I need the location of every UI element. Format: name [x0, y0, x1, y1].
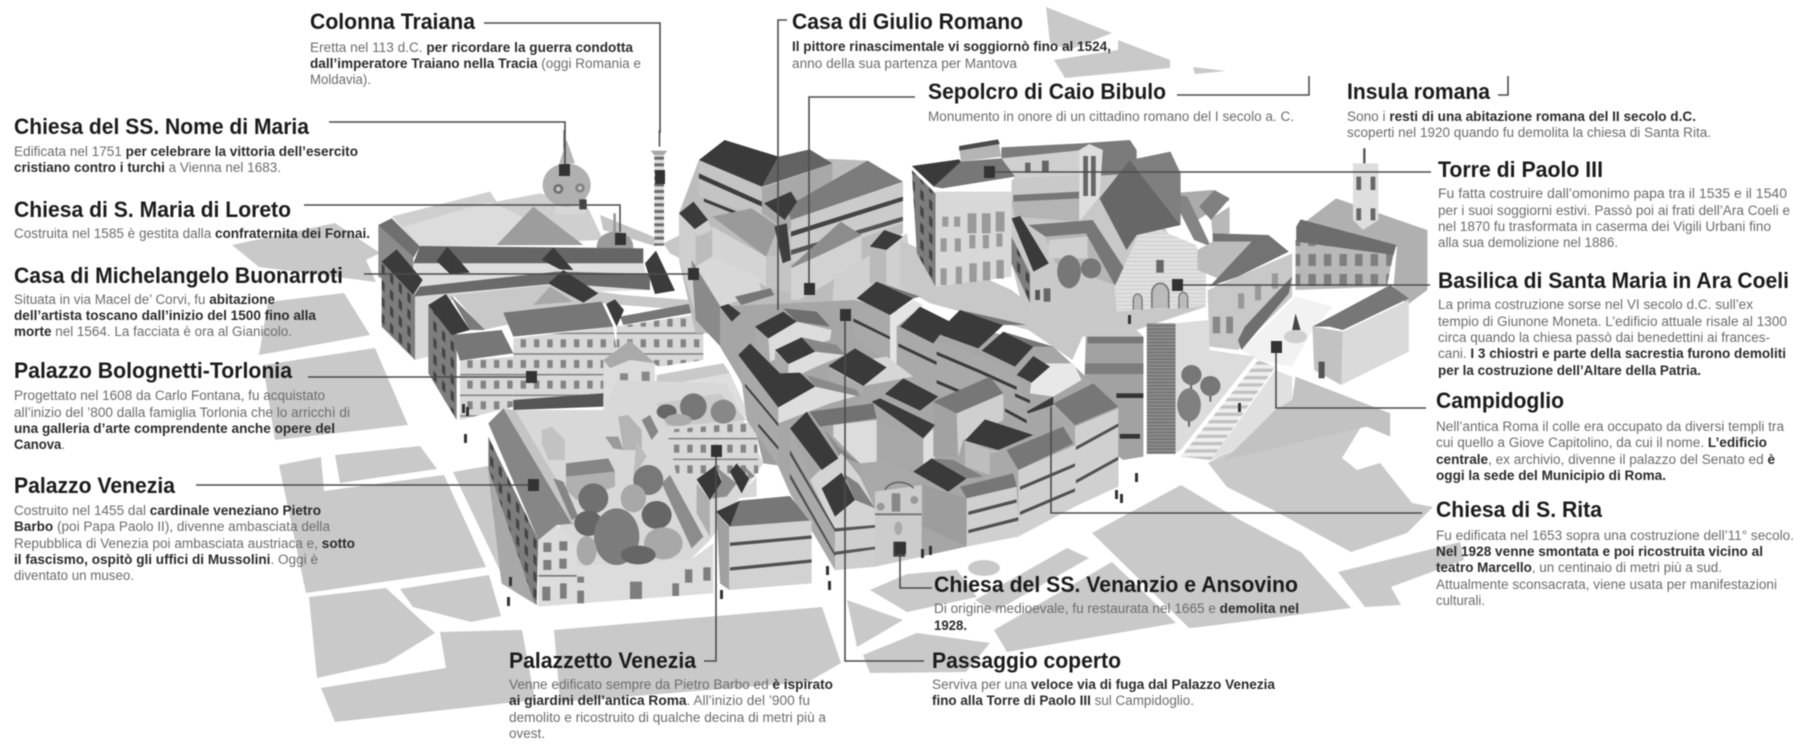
- label: Palazzetto Venezia: ovest.: [509, 726, 545, 741]
- Palazzo Nuovo side building: [1198, 233, 1292, 350]
- label: Palazzo Venezia: Costruito nel 1455 dal cardinale veneziano Pietro: [14, 503, 321, 518]
- Palazzo Venezia courtyard: [488, 380, 787, 607]
- map illustration: [232, 7, 1464, 722]
- Palazzo dei Conservatori: [1312, 285, 1409, 385]
- label: Chiesa del SS. Nome di Maria: Chiesa del SS. Nome di Maria: [14, 114, 309, 139]
- label: Basilica di Santa Maria in Ara Coeli: circa quando la chiesa passò dai benedettini ai frances-: [1438, 330, 1770, 345]
- label: Casa di Michelangelo Buonarroti: Situata in via Macel de’ Corvi, fu abitazione: [14, 292, 275, 307]
- label: Passaggio coperto: [932, 648, 1275, 708]
- Piazza del Campidoglio: [1241, 297, 1333, 367]
- label: Palazzetto Venezia: Venne edificato sempre da Pietro Barbo ed è ispirato: [509, 677, 833, 692]
- label: Campidoglio: Nell’antica Roma il colle era occupato da diversi templi tra: [1436, 419, 1784, 434]
- base of central block: [720, 300, 1118, 570]
- label: Passaggio coperto: fino alla Torre di Paolo III sul Campidoglio.: [932, 693, 1194, 708]
- label: Casa di Giulio Romano: [792, 9, 1111, 71]
- label: Chiesa di S. Rita: teatro Marcello, un centinaio di metri più a sud.: [1436, 560, 1722, 575]
- label: Basilica di Santa Maria in Ara Coeli: [1438, 268, 1789, 378]
- label: Insula romana: Sono i resti di una abitazione romana del II secolo d.C.: [1347, 109, 1696, 124]
- label: Chiesa di S. Maria di Loreto: Chiesa di S. Maria di Loreto: [14, 197, 291, 222]
- label: Casa di Giulio Romano: Casa di Giulio Romano: [792, 9, 1023, 34]
- label: Torre di Paolo III: nel 1870 fu trasformata in caserma dei Vigili Urbani fino: [1438, 219, 1771, 234]
- leader: Basilica di Santa Maria in Ara Coeli: [1172, 279, 1430, 291]
- Capitoline buildings, Ara Coeli and stairs: [900, 139, 1427, 460]
- Basilica roof: [1099, 152, 1230, 250]
- label: Palazzo Venezia: Barbo (poi Papa Paolo II), divenne ambasciata della: [14, 519, 330, 534]
- leader: Passaggio coperto: [840, 309, 924, 661]
- leader: Insula romana: [1498, 76, 1508, 95]
- left palazzo complex with domes and column: [378, 130, 750, 420]
- church of SS. Venanzio e Ansovino: [860, 460, 923, 567]
- label: Palazzo Venezia: diventato un museo.: [14, 568, 134, 583]
- label: Campidoglio: Campidoglio: [1436, 388, 1564, 413]
- label: Basilica di Santa Maria in Ara Coeli: La prima costruzione sorse nel VI secolo d.C. sull’ex: [1438, 297, 1753, 312]
- label: Palazzo Bolognetti-Torlonia: Progettato nel 1608 da Carlo Fontana, fu acquistato: [14, 388, 325, 403]
- leader: Chiesa del SS. Nome di Maria: [329, 122, 570, 176]
- leader: S. Maria di Loreto: [304, 205, 626, 245]
- label: Palazzetto Venezia: [509, 648, 833, 741]
- mid houses: [738, 308, 1007, 477]
- label: Colonna Traiana: Colonna Traiana: [310, 9, 475, 34]
- label: Colonna Traiana: dall’imperatore Traiano nella Tracia (oggi Romania e: [310, 56, 641, 71]
- leader: Palazzetto Venezia: [704, 445, 722, 661]
- leader: Colonna Traiana: [484, 23, 665, 184]
- label: Torre di Paolo III: [1438, 157, 1790, 250]
- label: Chiesa del SS. Venanzio e Ansovino: Di origine medioevale, fu restaurata nel 1665 e demolita nel: [934, 601, 1299, 616]
- leader: Sepolcro to Insula: [1177, 76, 1309, 95]
- Senatorio with tower: [1296, 148, 1427, 305]
- label: Palazzo Venezia: Repubblica di Venezia poi ambasciata austriaca e, sotto: [14, 536, 355, 551]
- label: Passaggio coperto: Passaggio coperto: [932, 648, 1121, 673]
- label: Chiesa di S. Rita: Attualmente sconsacrata, viene usata per manifestazioni: [1436, 577, 1777, 592]
- Cloister: [1012, 216, 1127, 313]
- leader: Campidoglio: [1271, 341, 1426, 408]
- label: Chiesa di S. Rita: Fu edificata nel 1653 sopra una costruzione dell’11° secolo.: [1436, 528, 1794, 543]
- label: Chiesa di S. Rita: culturali.: [1436, 593, 1485, 608]
- label: Casa di Michelangelo Buonarroti: [14, 263, 343, 339]
- label: Sepolcro di Caio Bibulo: Sepolcro di Caio Bibulo: [928, 79, 1166, 104]
- dark roofs row: [857, 282, 1050, 383]
- ground: city blocks: [232, 7, 1464, 722]
- Basilica façade: [1115, 230, 1206, 312]
- label: Chiesa del SS. Nome di Maria: cristiano contro i turchi a Vienna nel 1683.: [14, 160, 281, 175]
- label: Casa di Michelangelo Buonarroti: Casa di Michelangelo Buonarroti: [14, 263, 343, 288]
- label: Torre di Paolo III: Torre di Paolo III: [1438, 157, 1603, 182]
- label: Chiesa del SS. Venanzio e Ansovino: 1928.: [934, 618, 967, 633]
- dense central houses: [720, 282, 1118, 570]
- label: Colonna Traiana: [310, 9, 641, 87]
- long row of houses behind: [853, 300, 1082, 423]
- label: Chiesa di S. Rita: Nel 1928 venne smontata e poi ricostruita vicino al: [1436, 544, 1763, 559]
- label: Palazzo Bolognetti-Torlonia: all’inizio del ’800 dalla famiglia Torlonia che lo arricchì di: [14, 405, 350, 420]
- label: Insula romana: Insula romana: [1347, 79, 1490, 104]
- label: Basilica di Santa Maria in Ara Coeli: tempio di Giunone Moneta. L’edificio attuale risale al 1300: [1438, 314, 1787, 329]
- trees in the garden: [574, 465, 683, 565]
- leader: Torre di Paolo III: [984, 166, 1431, 178]
- label: Passaggio coperto: Serviva per una veloce via di fuga dal Palazzo Venezia: [932, 677, 1275, 692]
- label: Casa di Michelangelo Buonarroti: dell’artista toscano dall’inizio del 1500 fino alla: [14, 308, 316, 323]
- label: Chiesa del SS. Venanzio e Ansovino: [934, 572, 1299, 633]
- label: Palazzo Bolognetti-Torlonia: [14, 358, 350, 452]
- front right row: [913, 383, 1118, 547]
- label: Campidoglio: cui quello a Giove Capitolino, da cui il nome. L’edificio: [1436, 435, 1767, 450]
- label: Chiesa di S. Maria di Loreto: [14, 197, 370, 241]
- lower left column of houses: [790, 412, 875, 570]
- label: Chiesa del SS. Nome di Maria: [14, 114, 358, 175]
- icon: Trajan column: [651, 130, 667, 246]
- leader: Palazzo Bolognetti-Torlonia: [308, 371, 537, 383]
- label: Insula romana: scoperti nel 1920 quando fu demolita la chiesa di Santa Rita.: [1347, 125, 1711, 140]
- label: Torre di Paolo III: per i suoi soggiorni estivi. Passò poi ai frati dell’Ara Coeli e: [1438, 203, 1790, 218]
- label: Palazzo Bolognetti-Torlonia: Canova.: [14, 437, 65, 452]
- central upper cluster of houses: [679, 140, 915, 347]
- leader: Casa di Michelangelo: [364, 268, 699, 280]
- leader: Casa di Giulio Romano: [778, 20, 787, 310]
- Palazzo with Torre di Paolo III: [912, 139, 1137, 287]
- label: Palazzetto Venezia: ai giardini dell’antica Roma. All’inizio del ’900 fu: [509, 693, 810, 708]
- label: Campidoglio: [1436, 388, 1784, 483]
- label: Casa di Giulio Romano: Il pittore rinascimentale vi soggiornò fino al 1524,: [792, 39, 1111, 54]
- label: Colonna Traiana: Moldavia).: [310, 72, 371, 87]
- label: Palazzetto Venezia: Palazzetto Venezia: [509, 648, 696, 673]
- label: Palazzo Venezia: il fascismo, ospitò gli uffici di Mussolini. Oggi è: [14, 552, 318, 567]
- label: Palazzetto Venezia: demolito e ricostruito di qualche decina di metri più a: [509, 710, 826, 725]
- label: Palazzo Venezia: Palazzo Venezia: [14, 473, 175, 498]
- label: Sepolcro di Caio Bibulo: Monumento in onore di un cittadino romano del I secolo a. C.: [928, 109, 1294, 124]
- label: Casa di Michelangelo Buonarroti: morte nel 1564. La facciata è ora al Gianicolo.: [14, 324, 292, 339]
- leader: Palazzo Venezia: [196, 479, 539, 491]
- label: Basilica di Santa Maria in Ara Coeli: cani. I 3 chiostri e parte della sacrestia furono demoliti: [1438, 346, 1786, 361]
- Aracoeli stairs and buildings beside: [1083, 320, 1390, 460]
- label: Basilica di Santa Maria in Ara Coeli: per la costruzione dell’Altare della Patria.: [1438, 363, 1701, 378]
- label: Torre di Paolo III: Fu fatta costruire dall’omonimo papa tra il 1535 e il 1540: [1438, 186, 1787, 201]
- label: Insula romana: [1347, 79, 1711, 140]
- label: Sepolcro di Caio Bibulo: [928, 79, 1294, 124]
- Palazzetto façade: [657, 393, 758, 475]
- pedestrians: [462, 315, 1241, 606]
- icon: dome of SS. Nome di Maria: [543, 130, 591, 214]
- label: Torre di Paolo III: alla sua demolizione nel 1886.: [1438, 235, 1618, 250]
- building front of Palazzo Venezia: [716, 496, 812, 590]
- label: Campidoglio: oggi la sede del Municipio di Roma.: [1436, 468, 1666, 483]
- leader: SS. Venanzio e Ansovino: [895, 542, 932, 588]
- label: Colonna Traiana: Eretta nel 113 d.C. per ricordare la guerra condotta: [310, 40, 633, 55]
- label: Palazzo Venezia: [14, 473, 355, 583]
- label: Palazzo Bolognetti-Torlonia: Palazzo Bolognetti-Torlonia: [14, 358, 292, 383]
- label: Chiesa di S. Rita: Chiesa di S. Rita: [1436, 497, 1602, 522]
- label: Palazzo Bolognetti-Torlonia: una galleria d’arte comprendente anche opere del: [14, 421, 335, 436]
- leader lines and markers: [196, 20, 1508, 661]
- leader: Chiesa di S. Rita: [1051, 407, 1422, 513]
- label: Chiesa del SS. Nome di Maria: Edificata nel 1751 per celebrare la vittoria dell’esercito: [14, 144, 358, 159]
- label: Campidoglio: centrale, ex archivio, divenne il palazzo del Senato ed è: [1436, 452, 1775, 467]
- icon: Loreto dome: [597, 213, 633, 262]
- leader: Sepolcro di Caio Bibulo: [804, 97, 915, 295]
- label: Chiesa del SS. Venanzio e Ansovino: Chiesa del SS. Venanzio e Ansovino: [934, 572, 1298, 597]
- label: Chiesa di S. Maria di Loreto: Costruita nel 1585 è gestita dalla confraternita dei Fornai.: [14, 226, 370, 241]
- label: Chiesa di S. Rita: [1436, 497, 1794, 608]
- label: Casa di Giulio Romano: anno della sua partenza per Mantova: [792, 56, 1017, 71]
